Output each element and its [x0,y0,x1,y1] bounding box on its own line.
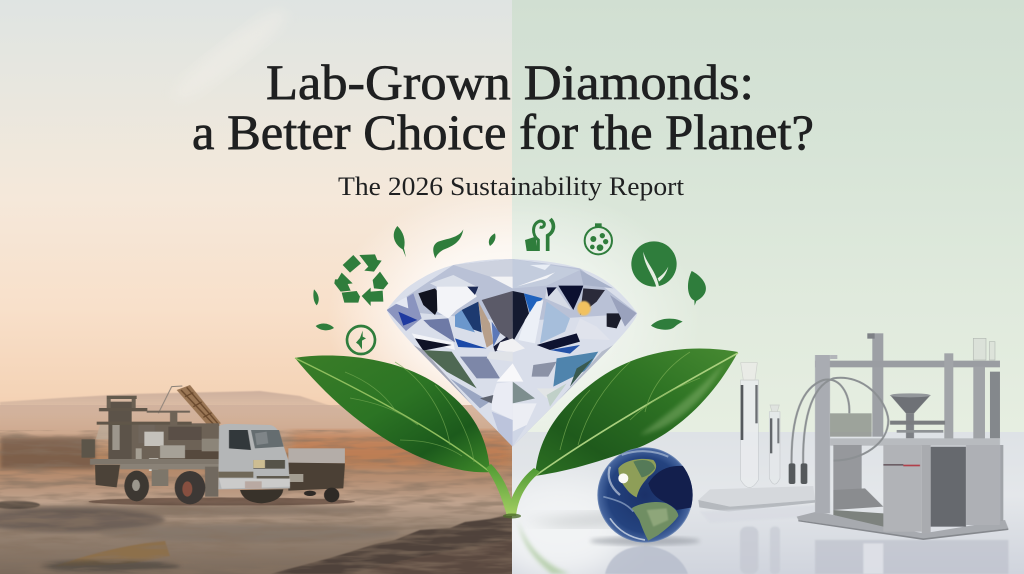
icon: tiny leaf [313,289,319,305]
crown [387,259,637,322]
left edge facets [387,293,422,331]
truck ground shadow [88,498,355,506]
left leaf [295,356,490,472]
background: lab side wall [512,0,1024,432]
machine mechanism [830,413,872,437]
icon: long leaf [433,229,463,258]
dark ocean [648,466,697,510]
right facets [518,300,543,343]
icon: small leaf [489,233,495,246]
south america [632,502,678,541]
north america [618,459,656,497]
icon: recycle [334,254,388,306]
machine frame back [872,333,883,437]
title [192,54,814,160]
distant hills [0,390,328,405]
truck tower [108,402,132,460]
truck body [130,423,219,464]
subtitle: The 2026 Sustainability Report [338,172,685,201]
CVD machine [789,333,1008,574]
truck cab [218,424,290,489]
center light glow [345,204,651,412]
center facets [482,291,513,342]
truck chassis [90,459,220,465]
right leaf [535,348,738,476]
diamond [386,259,637,446]
truck mast [177,385,221,426]
glass tray [698,486,815,507]
hoses [792,380,849,470]
icon: leaf disc [631,241,677,293]
icon: plant pot [525,219,553,251]
clouds [603,497,633,512]
earth globe [590,447,700,574]
icon: clock circle [347,326,375,354]
right green icons [525,219,706,330]
machine reflection [815,540,1008,574]
icon: leaf lower [651,319,683,330]
truck wheels [124,471,149,501]
icon: leaf top [394,226,406,257]
small test tube [769,412,780,484]
machine table and cabinets [830,438,1000,446]
leaf stems [486,464,540,518]
drilling truck [82,385,355,506]
icon: leaf right [688,271,706,306]
lab glassware [698,363,815,574]
truck rear bed [288,448,345,463]
globe reflection [605,546,688,574]
soil mound [270,514,512,574]
glassware reflection [740,527,758,574]
title: a Better Choice for the Planet? [192,104,814,160]
machine base [797,512,1008,539]
icon: flat leaf [316,323,334,330]
lab floor [490,432,1024,574]
mining landscape [0,391,512,574]
left green icons [313,226,495,354]
machine front post [815,355,830,513]
large test tube [741,380,758,487]
background: mining side sky [0,0,512,440]
pavilion facets [422,350,477,388]
title: Lab-Grown Diamonds: [266,54,754,110]
icon: recycle badge [585,223,612,254]
